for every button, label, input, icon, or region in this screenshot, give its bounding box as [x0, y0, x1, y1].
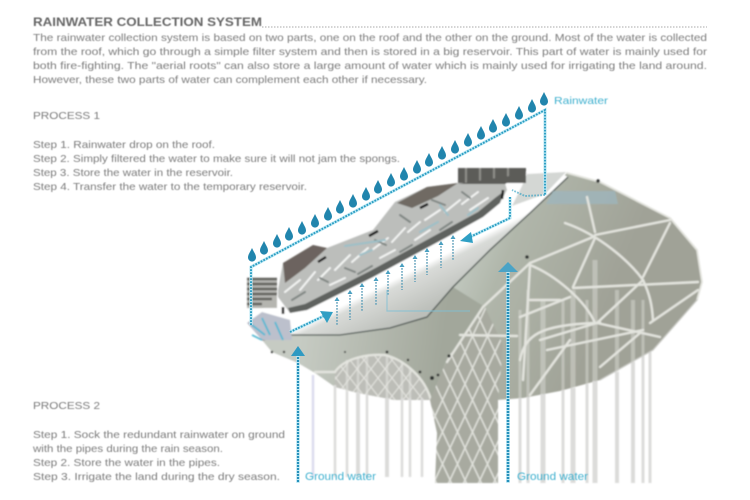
trunk lattice [430, 307, 503, 483]
left dome rib [315, 355, 431, 400]
dark structural dots [271, 179, 600, 380]
process 2 text: Step 1. Sock the redundant rainwater on ground [33, 429, 285, 441]
pipe connector on roof [387, 290, 470, 311]
process 2 text: Step 3. Irrigate the land during the dry season. [33, 471, 280, 483]
intro text block: The rainwater collection system is based on two parts, one on the roof and the other on the ground. Most of the water is collected [33, 32, 707, 44]
label: ground water left: Ground water [305, 471, 376, 483]
columns: right side below canopy [520, 352, 650, 483]
process 1 text: Step 4. Transfer the water to the temporary reservoir. [33, 181, 307, 193]
rainwater drops [248, 92, 548, 262]
building left striped blocks [247, 278, 277, 308]
intro text block: However, these two parts of water can complement each other if necessary. [33, 74, 427, 86]
light grey top rim area [512, 172, 566, 206]
ground water arrow right [498, 262, 518, 483]
process 1 text: Step 2. Simply filtered the water to make sure it will not jam the spongs. [33, 153, 400, 165]
left dome lattice [335, 355, 431, 400]
intro text block: from the roof, which go through a simple filter system and then is stored in a big reservoir. This part of water is mainly used for [33, 46, 708, 58]
process 2 text: Step 2. Store the water in the pipes. [33, 457, 220, 469]
label: ground water right: Ground water [517, 471, 588, 483]
process 1 text: Step 3. Store the water in the reservoir. [33, 167, 233, 179]
canopy lattice ribs [447, 173, 702, 395]
mushroom tower illustration [247, 168, 702, 483]
process 1 text [33, 110, 400, 193]
process 2 text: PROCESS 2 [33, 400, 100, 412]
process 2 text: with the pipes during the rain season. [32, 443, 223, 455]
canopy underside: left area [262, 287, 485, 400]
building roof panels [283, 245, 327, 283]
intro text block [33, 32, 708, 86]
roof-top building body [278, 183, 507, 313]
small upward arrows [334, 235, 456, 326]
intro text block: both fire-fighting. The "aerial roots" can also store a large amount of water which is mainly used for irrigating the land around. [33, 60, 707, 72]
ground water arrow left [291, 346, 305, 483]
title: RAINWATER COLLECTION SYSTEM [33, 15, 262, 29]
process 1 text: Step 1. Rainwater drop on the roof. [33, 139, 215, 151]
collection arrows on roof [290, 190, 545, 332]
mottled canopy tip [247, 312, 292, 340]
light blue tank band [546, 191, 618, 204]
canopy underside: right dome [430, 173, 702, 400]
faint columns over canopy [520, 260, 643, 398]
roof upper surface [253, 172, 568, 340]
top right striped blocks [458, 168, 527, 184]
columns: left side [313, 375, 422, 477]
roof ridge line [262, 177, 568, 340]
faint columns inside left dome [347, 356, 410, 398]
process 1 text: PROCESS 1 [33, 110, 100, 122]
black accents [283, 190, 503, 314]
building dark lower edge [288, 192, 503, 313]
building mottled texture [285, 192, 488, 300]
label: rainwater: Rainwater [554, 95, 609, 107]
rainwater catchment dotted outline [251, 110, 545, 325]
process 2 text [32, 400, 285, 483]
